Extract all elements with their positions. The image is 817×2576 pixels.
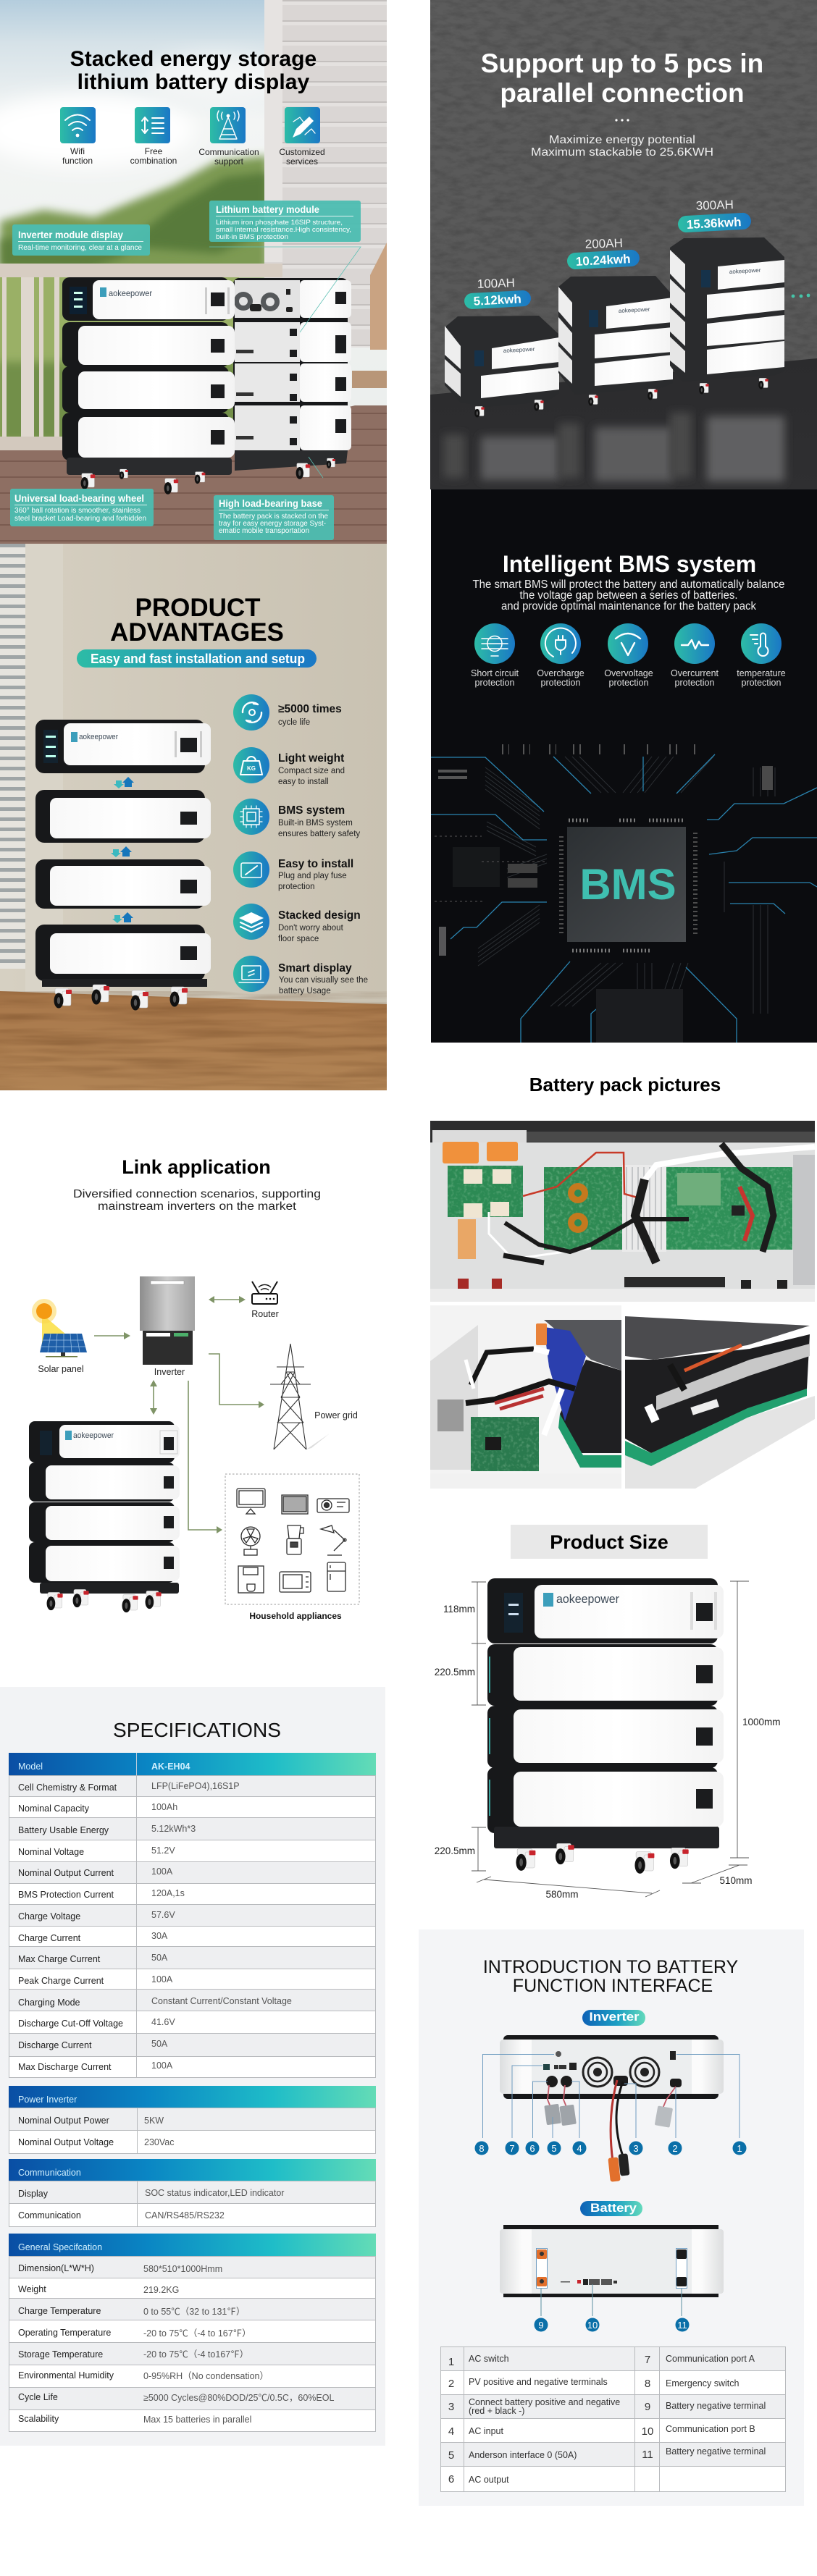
exploded battery stack (35, 720, 211, 1011)
feature icon: wifi: Wifi (70, 146, 85, 156)
feature icon: free combination (130, 107, 177, 166)
subtitle pill: Easy and fast installation and setup (91, 652, 305, 666)
label: 200AH: 200AH (585, 236, 623, 251)
feature icon: communication (198, 107, 259, 167)
table: model: 50A (151, 2039, 168, 2049)
label: 200AH: 10.24kwh (575, 252, 631, 269)
interface legend table: 3 (448, 2401, 454, 2413)
number markers: inverter: 3 (633, 2143, 639, 2154)
description: and provide optimal maintenance for the battery pack (501, 600, 756, 613)
battery stack with dimensions (487, 1578, 724, 1874)
panel: intelligent BMS system (431, 489, 817, 1043)
table: general specification: Storage Temperature (18, 2349, 103, 2360)
interface legend table: Battery negative terminal (666, 2401, 766, 2411)
table: general specification: General Specifcation (18, 2242, 102, 2252)
callout: lithium battery module (209, 201, 361, 242)
table: model: Cell Chemistry & Format (18, 1782, 117, 1793)
table: communication (9, 2159, 376, 2227)
arrow: solar to inverter (94, 1332, 130, 1339)
title: Intelligent BMS system (503, 551, 756, 577)
panel: product size (435, 1525, 781, 1900)
table: general specification: -20 to 75℃（-4 to 167℉） (143, 2328, 251, 2339)
interface legend table: Communication port A (666, 2354, 755, 2364)
table: communication: CAN/RS485/RS232 (145, 2210, 225, 2221)
description: the voltage gap between a series of batteries. (520, 589, 737, 602)
icon: power grid tower: Power grid (314, 1410, 358, 1420)
label: 300AH (677, 198, 752, 233)
table: model: BMS Protection Current (18, 1890, 114, 1900)
icon: overcharge protection: Overcharge (537, 668, 585, 678)
icon: short circuit protection (471, 623, 519, 688)
icon: overcharge protection (537, 623, 585, 688)
advantage: smart display: You can visually see the (279, 976, 368, 985)
advantage: smart display: battery Usage (279, 987, 331, 996)
dimension labels (435, 1604, 781, 1900)
table: power inverter: Power Inverter (18, 2095, 77, 2105)
table: general specification: 219.2KG (143, 2285, 179, 2295)
icon: overcharge protection: protection (541, 678, 580, 688)
advantage: BMS system (233, 799, 360, 838)
feature icon: communication: Communication (198, 147, 259, 157)
chip with BMS label (567, 827, 686, 942)
callout: universal wheel: steel bracket Load-bearing and forbidden (14, 515, 146, 523)
table: model: Peak Charge Current (18, 1976, 104, 1986)
chip with BMS label: BMS (579, 860, 676, 909)
callout: universal wheel (10, 489, 154, 526)
table: communication: Communication (18, 2168, 81, 2178)
table: model (9, 1753, 376, 2078)
table: general specification: Weight (18, 2284, 46, 2294)
callout: high load-bearing base (214, 495, 334, 540)
callout: universal wheel: 360° ball rotation is smoother, stainless (14, 507, 141, 515)
table: general specification (9, 2234, 376, 2431)
battery stack: 100AH (445, 316, 559, 417)
title: Support up to 5 pcs in (481, 49, 763, 78)
callout: inverter module display: Inverter module display (18, 229, 123, 240)
description (472, 578, 785, 613)
feature icon: free combination: Free (145, 146, 163, 156)
interface legend table: 6 (448, 2473, 454, 2485)
callout: universal wheel: Universal load-bearing wheel (14, 492, 144, 504)
title: Stacked energy storage (70, 47, 317, 71)
table: model: 50A (151, 1953, 168, 1963)
dimension labels: 220.5mm (435, 1667, 475, 1678)
interface legend table: 4 (448, 2425, 454, 2438)
appliance: fan (241, 1527, 260, 1555)
label: 100AH: 100AH (477, 276, 515, 291)
advantage: stacked design: Don't worry about (278, 924, 344, 933)
battery stack: 300AH (670, 237, 784, 394)
battery stack: front view (62, 277, 235, 494)
advantage: light weight: easy to install (278, 778, 329, 786)
panel: link application (29, 1156, 359, 1621)
photo: inverter internals (430, 1121, 815, 1302)
feature icon: communication: support (214, 156, 244, 167)
advantage: light weight (233, 747, 345, 786)
photo: cables and battery side (430, 1305, 621, 1489)
battery stack: rear view (233, 278, 351, 479)
exploded battery stack: aokeepower (79, 733, 118, 741)
interface legend table: (red + black -) (469, 2406, 524, 2416)
battery stack: 300AH: aokeepower (729, 267, 761, 275)
callout: lithium battery module: Lithium battery module (216, 203, 319, 215)
icon: temperature protection: protection (742, 678, 781, 688)
table: power inverter: 5KW (144, 2116, 164, 2126)
interface legend table: Connect battery positive and negative (469, 2397, 620, 2407)
table: model: Nominal Capacity (18, 1803, 90, 1814)
title (481, 49, 763, 108)
interface legend table (440, 2346, 785, 2492)
callout: high load-bearing base: ematic mobile transportation (219, 527, 309, 535)
number markers: inverter: 7 (509, 2143, 515, 2154)
title (70, 47, 317, 94)
appliance: projector (317, 1499, 349, 1512)
inverter back diagram (500, 2035, 724, 2182)
battery stack with dimensions: aokeepower (556, 1593, 619, 1606)
title: SPECIFICATIONS (113, 1719, 281, 1741)
title: ADVANTAGES (110, 618, 284, 647)
icon: temperature protection (737, 623, 786, 688)
appliance: coffee machine (238, 1566, 264, 1593)
icon: overvoltage protection (604, 623, 653, 688)
table: general specification: Scalability (18, 2414, 59, 2424)
icon: router: Router (251, 1309, 279, 1319)
table: model: 100A (151, 2061, 173, 2071)
inverter pill: Inverter (590, 2010, 640, 2024)
battery back diagram (500, 2225, 724, 2297)
advantage: cycle life: ≥5000 times (278, 703, 342, 715)
label: 100AH (464, 276, 532, 309)
table: model: Discharge Current (18, 2040, 92, 2050)
panel: battery pack pictures (430, 1074, 815, 1489)
battery pill: Battery (590, 2201, 637, 2215)
dimension labels: 1000mm (742, 1717, 781, 1727)
interface legend table: 1 (448, 2356, 454, 2368)
table: communication: Display (18, 2189, 49, 2199)
feature icon: wifi (60, 107, 96, 166)
advantage: stacked design (233, 904, 361, 943)
advantage: cycle life: cycle life (278, 718, 310, 727)
interface legend table: 8 (645, 2378, 650, 2390)
number markers: inverter: 1 (737, 2143, 742, 2154)
advantage: smart display: Smart display (278, 962, 352, 975)
label: 300AH: 300AH (696, 198, 734, 213)
table: model: 5.12kWh*3 (151, 1824, 196, 1834)
label: household appliances: Household appliances (249, 1611, 342, 1621)
advantage: light weight: Light weight (278, 752, 344, 765)
interface legend table: 10 (642, 2425, 653, 2438)
table: general specification: -20 to 75℃（-4 to167℉） (143, 2349, 248, 2360)
table: general specification: Operating Temperature (18, 2328, 111, 2338)
leader line: battery module (209, 247, 361, 332)
callout lines: battery (541, 2284, 682, 2316)
callout: inverter module display: Real-time monitoring, clear at a glance (18, 244, 142, 252)
icon: overvoltage protection: protection (609, 678, 648, 688)
table: general specification: Charge Temperature (18, 2306, 101, 2316)
advantage: stacked design: Stacked design (278, 909, 361, 922)
number markers: inverter: 2 (672, 2143, 678, 2154)
table: general specification: 580*510*1000Hmm (143, 2264, 222, 2274)
panel: product advantages (0, 544, 387, 1090)
advantage: cycle life (233, 694, 342, 731)
label: 300AH: 15.36kwh (686, 215, 742, 232)
subtitle: Maximize energy potential (549, 134, 695, 146)
callout: high load-bearing base: High load-bearing base (219, 497, 322, 509)
icon: solar panel: Solar panel (38, 1364, 84, 1374)
table: model: 41.6V (151, 2017, 175, 2027)
callout: high load-bearing base: The battery pack is stacked on the (219, 513, 329, 521)
advantage: easy to install (233, 851, 353, 891)
title: INTRODUCTION TO BATTERY (483, 1957, 738, 1977)
battery stack: aokeepower (73, 1431, 114, 1440)
callout: lithium battery module: Lithium iron phosphate 16SIP structure, (216, 219, 343, 227)
interface legend table: PV positive and negative terminals (469, 2377, 608, 2387)
feature icon: free combination: combination (130, 156, 177, 166)
panel: parallel connection (430, 0, 817, 489)
interface legend table: 2 (448, 2378, 454, 2390)
subtitle (531, 134, 713, 159)
advantage: light weight: KG (247, 765, 256, 772)
interface legend table: 5 (448, 2449, 454, 2462)
title: Battery pack pictures (529, 1074, 721, 1095)
number markers: battery: 10 (587, 2320, 598, 2331)
battery stack (29, 1421, 180, 1612)
feature icon: customized services: Customized (279, 147, 325, 157)
appliance: microwave (280, 1572, 311, 1592)
battery stack: 200AH: aokeepower (619, 306, 650, 314)
callout: inverter module display (12, 224, 150, 256)
battery pill (580, 2201, 642, 2216)
table: model: 51.2V (151, 1845, 175, 1856)
icon: router (251, 1281, 279, 1319)
appliance: television (282, 1495, 308, 1514)
advantage: easy to install: Plug and play fuse (278, 872, 347, 880)
icon: overcurrent protection: Overcurrent (671, 668, 719, 678)
table: model: 100Ah (151, 1802, 177, 1812)
interface legend table: Anderson interface 0 (50A) (469, 2450, 577, 2460)
table: general specification: 0-95%RH（No condensation） (143, 2371, 269, 2381)
advantage: stacked design: floor space (278, 935, 319, 943)
table: general specification: Environmental Humidity (18, 2370, 114, 2381)
table: communication: Communication (18, 2210, 81, 2221)
separator dots (615, 119, 629, 122)
table: model: Constant Current/Constant Voltage (151, 1996, 292, 2006)
callout: lithium battery module: small internal resistance.High consistency, (216, 226, 351, 234)
dimension labels: 580mm (545, 1889, 579, 1900)
subtitle: Diversified connection scenarios, supporting (73, 1188, 321, 1200)
appliance: blender (287, 1525, 303, 1554)
heading (511, 1525, 708, 1559)
table: model: 100A (151, 1866, 173, 1877)
icon: overvoltage protection: Overvoltage (604, 668, 653, 678)
table: general specification: Dimension(L*W*H) (18, 2263, 94, 2273)
subtitle (73, 1188, 321, 1213)
table: power inverter: 230Vac (144, 2137, 174, 2147)
feature icon: wifi: function (62, 156, 93, 166)
dimension labels: 220.5mm (435, 1845, 475, 1856)
title: Link application (122, 1156, 271, 1178)
table: model: AK-EH04 (151, 1761, 190, 1772)
table: general specification: 0 to 55℃（32 to 131℉） (143, 2307, 245, 2317)
table: model: 57.6V (151, 1910, 175, 1920)
interface legend table: 11 (642, 2449, 653, 2461)
number markers: inverter: 5 (551, 2143, 557, 2154)
callout: lithium battery module: built-in BMS protection (216, 233, 288, 241)
arrow: inverter to router (209, 1296, 246, 1303)
appliance: monitor (237, 1489, 265, 1514)
number markers: inverter (475, 2142, 746, 2155)
title (110, 594, 284, 647)
icon: overcurrent protection: protection (675, 678, 714, 688)
table: model: Nominal Voltage (18, 1847, 84, 1857)
panel: battery function interface (419, 1929, 804, 2506)
dimension labels: 510mm (719, 1875, 753, 1886)
table: general specification: Cycle Life (18, 2392, 58, 2402)
subtitle: Maximum stackable to 25.6KWH (531, 146, 713, 159)
number markers: battery (535, 2318, 690, 2331)
interface legend table: Battery negative terminal (666, 2446, 766, 2457)
photo: battery module (624, 1305, 815, 1489)
title: FUNCTION INTERFACE (513, 1976, 713, 1996)
feature icon: customized services: services (286, 156, 318, 167)
title: PRODUCT (135, 594, 261, 622)
table: model: Charge Voltage (18, 1911, 80, 1922)
interface legend table: AC input (469, 2426, 503, 2436)
interface legend table: AC output (469, 2475, 509, 2485)
panel: stacked energy storage display (0, 0, 387, 544)
advantage: BMS system: BMS system (278, 804, 345, 817)
interface legend table: Emergency switch (666, 2378, 739, 2388)
number markers: inverter: 6 (529, 2143, 535, 2154)
table: model: Discharge Cut-Off Voltage (18, 2019, 123, 2029)
number markers: inverter: 4 (577, 2143, 582, 2154)
arrows between battery units (111, 777, 134, 923)
table: general specification: Max 15 batteries in parallel (143, 2415, 251, 2425)
number markers: inverter: 8 (479, 2143, 485, 2154)
advantage: easy to install: Easy to install (278, 858, 353, 870)
arrow: inverter to appliances (188, 1381, 222, 1533)
table: power inverter: Nominal Output Power (18, 2116, 109, 2126)
household appliances box (225, 1474, 359, 1621)
table: model: Battery Usable Energy (18, 1825, 109, 1835)
icon: short circuit protection: protection (475, 678, 514, 688)
title: lithium battery display (77, 70, 310, 94)
callout lines: inverter (482, 2055, 740, 2138)
dimension labels: 118mm (443, 1604, 475, 1615)
advantage: easy to install: protection (278, 883, 315, 891)
inverter: Inverter (154, 1367, 185, 1377)
table: model: Max Discharge Current (18, 2062, 112, 2072)
arrow: inverter to power grid (209, 1354, 264, 1408)
inverter (140, 1276, 195, 1377)
callout: high load-bearing base: tray for easy energy storage Syst- (219, 520, 326, 528)
label: 200AH (566, 236, 640, 270)
icon: short circuit protection: Short circuit (471, 668, 519, 678)
inverter pill (582, 2010, 645, 2026)
appliance: refrigerator (327, 1562, 345, 1591)
table: communication: SOC status indicator,LED indicator (145, 2188, 284, 2198)
appliance: lamp (321, 1525, 346, 1555)
advantage: BMS system: Built-in BMS system (278, 819, 353, 828)
table: model: LFP(LiFePO4),16S1P (151, 1781, 240, 1791)
advantage: BMS system: ensures battery safety (278, 830, 360, 838)
table: model: Model (18, 1761, 43, 1772)
table: model: 30A (151, 1931, 168, 1941)
arrow: inverter to battery (150, 1380, 157, 1415)
subtitle: mainstream inverters on the market (98, 1200, 297, 1213)
advantage: light weight: Compact size and (278, 767, 345, 775)
table: power inverter: Nominal Output Voltage (18, 2137, 114, 2147)
battery stack: 100AH: aokeepower (503, 346, 535, 354)
icon: overcurrent protection (671, 623, 719, 688)
leader line: base (309, 457, 323, 478)
heading: Product Size (550, 1531, 669, 1553)
interface legend table: Communication port B (666, 2424, 755, 2434)
table: model: Charging Mode (18, 1998, 80, 2008)
title: parallel connection (500, 78, 745, 108)
icon: temperature protection: temperature (737, 668, 786, 678)
table: model: Nominal Output Current (18, 1868, 114, 1878)
battery stack: 200AH (558, 276, 673, 405)
table: model: 120A,1s (151, 1888, 185, 1898)
interface legend table: AC switch (469, 2354, 509, 2364)
interface legend table: 9 (645, 2401, 650, 2413)
number markers: battery: 11 (677, 2320, 687, 2331)
number markers: battery: 9 (538, 2320, 544, 2331)
table: general specification: ≥5000 Cycles@80%DOD/25℃/0.5C，60%EOL (143, 2393, 334, 2403)
table: model: Charge Current (18, 1933, 81, 1943)
title (483, 1957, 738, 1996)
icon: solar panel (32, 1299, 87, 1374)
table: model: 100A (151, 1974, 173, 1984)
feature icon: customized services (279, 107, 325, 167)
table: power inverter (9, 2086, 376, 2154)
description: The smart BMS will protect the battery and automatically balance (472, 578, 785, 591)
label: 100AH: 5.12kwh (473, 292, 521, 308)
dimension lines (472, 1581, 749, 1897)
table: model: Max Charge Current (18, 1954, 101, 1964)
more dots (792, 294, 810, 298)
battery stack: front view: aokeepower (109, 288, 152, 298)
advantage: smart display (233, 956, 368, 996)
interface legend table: 7 (645, 2354, 650, 2366)
panel: specifications (0, 1687, 385, 2446)
icon: power grid tower (270, 1344, 358, 1449)
